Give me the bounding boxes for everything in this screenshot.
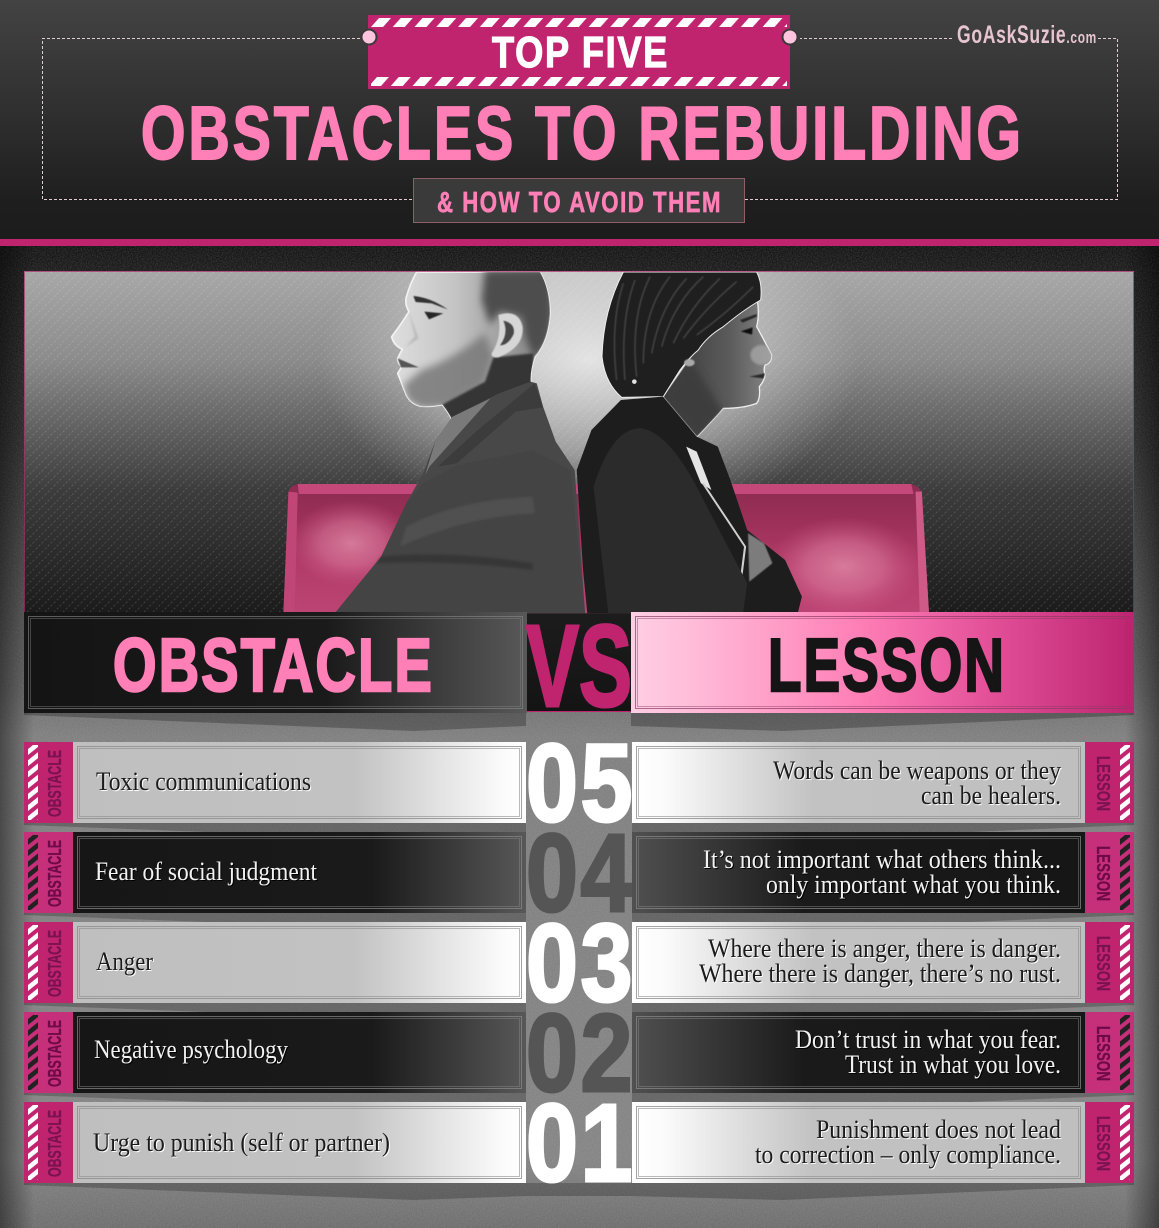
bodies xyxy=(335,382,802,613)
man's head xyxy=(392,270,552,423)
man's hair xyxy=(482,270,552,360)
lesson box xyxy=(632,1012,1085,1093)
lesson box: Punishment does not lead xyxy=(816,1115,1061,1144)
obstacle box xyxy=(73,742,526,823)
number 02: 02 xyxy=(526,992,635,1115)
man's ear xyxy=(492,313,523,357)
obstacle tab xyxy=(24,1012,73,1093)
lesson box: only important what you think. xyxy=(766,870,1061,899)
man's eye xyxy=(424,312,443,319)
man's neck xyxy=(442,353,533,423)
obstacle box xyxy=(73,832,526,913)
number 05: 05 xyxy=(526,722,635,845)
woman's lips xyxy=(749,373,765,378)
lesson heading bar xyxy=(631,612,1134,713)
lesson box xyxy=(632,832,1085,913)
banner pin left xyxy=(362,30,376,44)
woman's hair xyxy=(602,272,761,397)
obstacle tab: OBSTACLE xyxy=(45,840,65,907)
obstacle tab xyxy=(24,922,73,1003)
photo border lines xyxy=(24,272,1134,612)
man's brow xyxy=(413,296,448,309)
obstacle tab: OBSTACLE xyxy=(45,930,65,997)
lesson tab xyxy=(1085,742,1134,823)
row 03 xyxy=(24,902,1134,1025)
lesson box xyxy=(632,922,1085,1003)
top five banner: TOP FIVE xyxy=(492,28,669,77)
lesson box: to correction – only compliance. xyxy=(755,1140,1061,1169)
woman's eye xyxy=(741,327,753,335)
row 05 xyxy=(24,722,1134,845)
woman's head xyxy=(602,272,773,440)
header panel xyxy=(0,0,1159,246)
obstacle box xyxy=(73,1102,526,1183)
obstacle box: Toxic communications xyxy=(96,767,311,796)
lesson tab xyxy=(1085,1102,1134,1183)
lesson tab xyxy=(1085,922,1134,1003)
woman's ear xyxy=(684,359,695,366)
lesson tab: LESSON xyxy=(1093,1116,1113,1171)
lesson tab: LESSON xyxy=(1093,936,1113,991)
row 01 xyxy=(24,1082,1134,1205)
lesson box xyxy=(632,1102,1085,1183)
woman's body xyxy=(577,397,802,613)
number 03: 03 xyxy=(526,902,635,1025)
man's mouth xyxy=(398,358,419,367)
woman's earring xyxy=(632,379,637,384)
lesson heading bar: LESSON xyxy=(768,623,1006,707)
obstacle heading bar: OBSTACLE xyxy=(113,623,434,707)
obstacle box xyxy=(73,1012,526,1093)
woman's brow xyxy=(740,314,757,323)
lesson tab xyxy=(1085,1012,1134,1093)
lesson box: Words can be weapons or they xyxy=(773,756,1061,785)
obstacle box xyxy=(73,922,526,1003)
photo: couple back to back on a pink sofa xyxy=(24,271,1134,712)
subtitle box: & HOW TO AVOID THEM xyxy=(437,187,722,219)
top five banner xyxy=(368,15,790,89)
lesson box: Don’t trust in what you fear. xyxy=(795,1025,1061,1054)
woman's neck xyxy=(660,360,723,440)
obstacle tab xyxy=(24,1102,73,1183)
obstacle heading bar xyxy=(24,612,527,713)
row 04 xyxy=(24,812,1134,935)
dashed frame xyxy=(42,38,1118,200)
pink divider bar xyxy=(0,239,1159,246)
banner pin right xyxy=(782,30,798,44)
lesson tab: LESSON xyxy=(1093,756,1113,811)
row shadows xyxy=(24,823,1134,1200)
vs mark: VS xyxy=(526,601,632,731)
lesson box: can be healers. xyxy=(921,781,1061,810)
obstacle tab: OBSTACLE xyxy=(45,1020,65,1087)
lesson box xyxy=(632,742,1085,823)
man's stubble xyxy=(403,333,493,408)
obstacle tab: OBSTACLE xyxy=(45,1110,65,1177)
number 01: 01 xyxy=(526,1082,635,1205)
logo: GoAskSuzie.com xyxy=(957,21,1097,49)
lesson tab: LESSON xyxy=(1093,846,1113,901)
obstacle tab xyxy=(24,742,73,823)
obstacle box: Fear of social judgment xyxy=(95,857,318,886)
obstacle box: Anger xyxy=(96,947,153,976)
shadow under header boxes xyxy=(24,712,1134,731)
obstacle box: Urge to punish (self or partner) xyxy=(93,1128,390,1157)
number 04: 04 xyxy=(526,812,635,935)
page background xyxy=(0,246,1159,1228)
obstacle box: Negative psychology xyxy=(94,1035,288,1064)
subtitle box xyxy=(414,178,744,222)
lesson tab xyxy=(1085,832,1134,913)
obstacle tab: OBSTACLE xyxy=(45,750,65,817)
obstacle tab xyxy=(24,832,73,913)
lesson tab: LESSON xyxy=(1093,1026,1113,1081)
man's body xyxy=(335,382,585,613)
row 02 xyxy=(24,992,1134,1115)
lesson box: It’s not important what others think... xyxy=(703,845,1061,874)
lesson box: Where there is danger, there’s no rust. xyxy=(699,959,1061,988)
sofa xyxy=(283,484,929,617)
lesson box: Trust in what you love. xyxy=(845,1050,1061,1079)
lesson box: Where there is anger, there is danger. xyxy=(708,934,1061,963)
